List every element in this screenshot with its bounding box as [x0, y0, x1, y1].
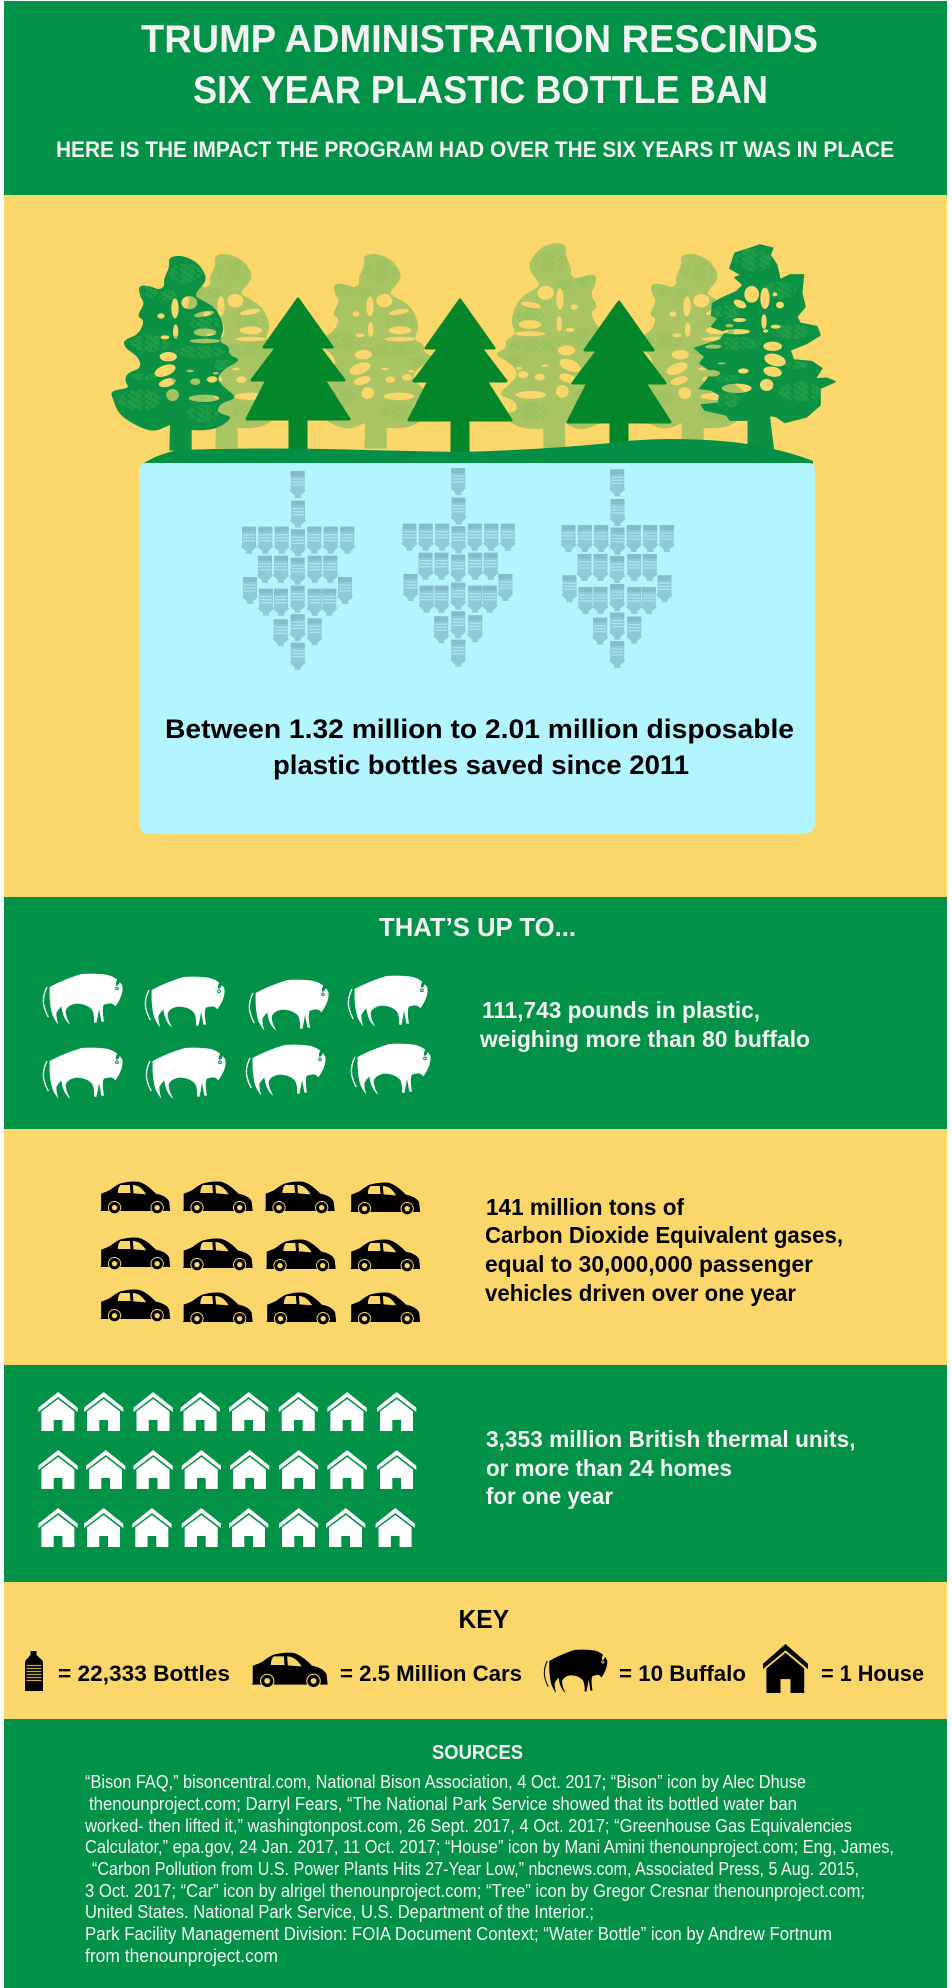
- sources heading: SOURCES: [432, 1742, 523, 1764]
- houses text: for one year: [486, 1483, 613, 1509]
- cars text: 141 million tons of: [486, 1194, 684, 1220]
- key: buffalo: = 10 Buffalo: [619, 1661, 746, 1686]
- key heading: KEY: [458, 1604, 509, 1634]
- sources text: thenounproject.com; Darryl Fears, “The National Park Service showed that its bottled water ban: [89, 1794, 797, 1814]
- panel: key: [4, 1582, 947, 1719]
- subtitle: HERE IS THE IMPACT THE PROGRAM HAD OVER THE SIX YEARS IT WAS IN PLACE: [56, 137, 894, 162]
- title: SIX YEAR PLASTIC BOTTLE BAN: [193, 69, 768, 112]
- key: bottle: [25, 1651, 230, 1691]
- cars text: [485, 1194, 843, 1306]
- cars text: vehicles driven over one year: [485, 1280, 796, 1306]
- cars text: equal to 30,000,000 passenger: [485, 1251, 813, 1277]
- houses text: or more than 24 homes: [486, 1455, 732, 1481]
- key: buffalo: [544, 1650, 746, 1693]
- panel: cars: [4, 1129, 947, 1365]
- panel: forest and bottles: [4, 195, 947, 897]
- sources text: Calculator,” epa.gov, 24 Jan. 2017, 11 Oct. 2017; “House” icon by Mani Amini thenounproject.com; Eng, James,: [85, 1837, 894, 1857]
- sources text: Park Facility Management Division: FOIA Document Context; “Water Bottle” icon by Andrew Fortnum: [85, 1924, 832, 1944]
- title: TRUMP ADMINISTRATION RESCINDS: [141, 18, 818, 61]
- houses text: [486, 1426, 856, 1509]
- key: car: = 2.5 Million Cars: [340, 1661, 522, 1686]
- panel: buffalo: [4, 897, 947, 1129]
- section heading: THAT’S UP TO...: [379, 912, 576, 942]
- sources text: worked- then lifted it,” washingtonpost.com, 26 Sept. 2017, 4 Oct. 2017; “Greenhouse Gas Equivalencies: [84, 1816, 852, 1836]
- buffalo text: [479, 997, 810, 1052]
- panel: houses: [4, 1365, 947, 1582]
- buffalo text: 111,743 pounds in plastic,: [482, 997, 760, 1023]
- water panel: [139, 463, 815, 834]
- background pale trees: [157, 243, 750, 451]
- bottle savings statement: [165, 714, 794, 780]
- houses text: 3,353 million British thermal units,: [486, 1426, 856, 1452]
- cars text: Carbon Dioxide Equivalent gases,: [485, 1222, 843, 1248]
- sources text: United States. National Park Service, U.S. Department of the Interior.;: [85, 1902, 594, 1922]
- bottle icons: [241, 468, 675, 670]
- dark leafy trees: [111, 245, 835, 451]
- sources text: “Bison FAQ,” bisoncentral.com, National Bison Association, 4 Oct. 2017; “Bison” icon by Alec Dhuse: [85, 1772, 806, 1792]
- sources text: 3 Oct. 2017; “Car” icon by alrigel thenounproject.com; “Tree” icon by Gregor Cresnar thenounproject.com;: [85, 1881, 865, 1901]
- key: car: [252, 1653, 522, 1688]
- sources text: [84, 1772, 894, 1966]
- car icons: [100, 1182, 420, 1325]
- header panel: [4, 1, 947, 195]
- bottle savings statement: Between 1.32 million to 2.01 million disposable: [165, 714, 794, 744]
- buffalo text: weighing more than 80 buffalo: [479, 1026, 810, 1052]
- panel: sources: [4, 1719, 947, 1988]
- bottle savings statement: plastic bottles saved since 2011: [273, 750, 689, 780]
- buffalo icons: [43, 974, 431, 1099]
- sources text: from thenounproject.com: [85, 1946, 278, 1966]
- sources text: “Carbon Pollution from U.S. Power Plants Hits 27-Year Low,” nbcnews.com, Associated Press, 5 Aug. 2015,: [92, 1859, 859, 1879]
- pine trees: [247, 299, 670, 454]
- key: house: = 1 House: [821, 1661, 924, 1686]
- key: bottle: = 22,333 Bottles: [58, 1661, 230, 1686]
- title: [141, 18, 818, 112]
- ground: [141, 439, 813, 468]
- key: house: [763, 1644, 924, 1693]
- house icons: [38, 1392, 416, 1547]
